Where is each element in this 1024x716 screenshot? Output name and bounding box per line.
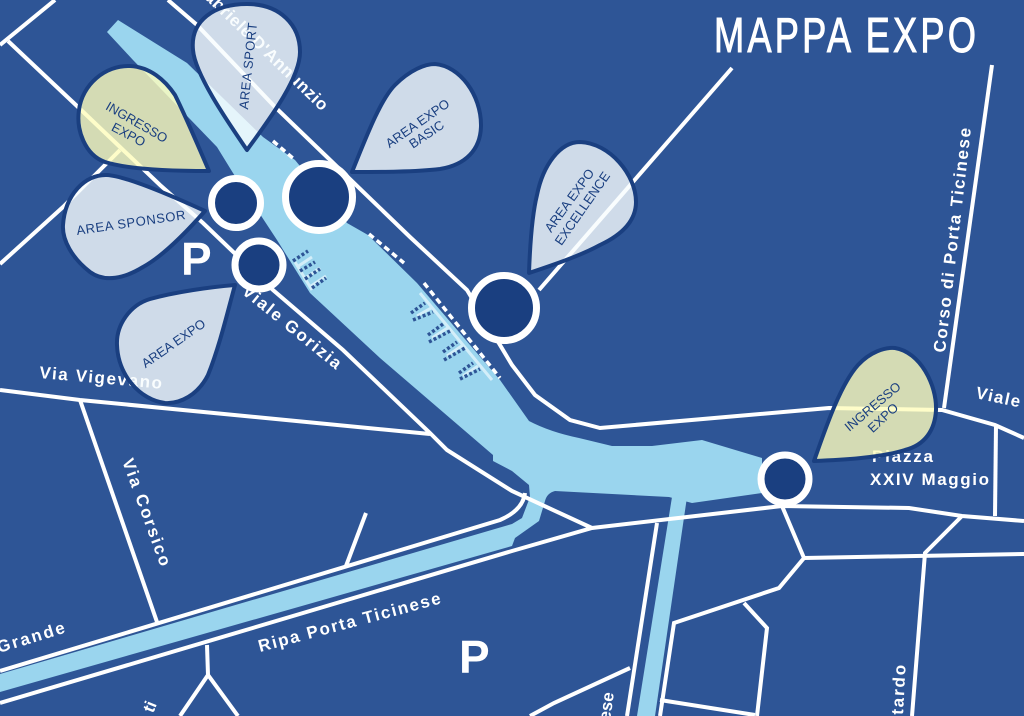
pin: area expo basic: BASIC: [406, 117, 447, 151]
street label: Viale Gorizia: Viale Gorizia: [238, 281, 346, 373]
pin: area expo: [117, 285, 235, 403]
street label: Viale: Viale: [974, 383, 1022, 411]
street label: Via Vigevano: Via Vigevano: [39, 363, 163, 393]
title: MAPPA EXPO: [714, 9, 976, 63]
pin: area expo basic: [352, 64, 481, 172]
street label: Piazza XXIV Maggio: [870, 447, 989, 489]
street label: Via Corsico: Via Corsico: [118, 456, 175, 569]
marker circle: ingresso east: [761, 455, 809, 503]
pin: ingresso expo west: EXPO: [109, 119, 148, 150]
street label: Piazza XXIV Maggio: Piazza: [872, 447, 934, 466]
parking stands: light stripes: [295, 257, 492, 380]
marker circle: basic: [286, 164, 352, 230]
pin: area sponsor: [63, 175, 205, 278]
pin: ingresso expo west: [78, 66, 209, 171]
street label: tardo: tardo: [888, 664, 910, 715]
marker circle: sponsor: [212, 178, 260, 228]
marker circle: expo: [235, 241, 283, 289]
street label: Ripa Porta Ticinese: Ripa Porta Ticinese: [256, 589, 443, 656]
pin: area expo excellence: AREA EXPO: [541, 166, 597, 235]
pin: area sport: AREA SPORT: [236, 22, 260, 110]
pin: area expo excellence: EXCELLENCE: [552, 169, 613, 248]
parking stands: dotted rows: [293, 251, 480, 379]
street label: Corso di Porta Ticinese: Corso di Porta Ticinese: [930, 127, 975, 353]
parking marker P north: P: [181, 233, 212, 285]
dashed white lines along the canal: [273, 141, 500, 378]
water: Darsena and canals: [0, 20, 762, 716]
pin: area expo excellence: [529, 142, 636, 273]
pin: area sport: [193, 4, 300, 150]
pin: ingresso expo west: INGRESSO: [103, 98, 170, 146]
pin: ingresso expo east: EXPO: [865, 400, 901, 436]
pin: area expo: AREA EXPO: [139, 316, 208, 371]
street label: ti: ti: [139, 698, 161, 715]
marker circle: excellence: [472, 276, 536, 340]
parking marker P south: P: [459, 631, 490, 683]
pin: ingresso expo east: [814, 348, 936, 461]
pin: ingresso expo east: INGRESSO: [842, 379, 904, 434]
street label: Piazza XXIV Maggio: XXIV Maggio: [870, 470, 989, 489]
pin: area expo basic: AREA EXPO: [383, 96, 452, 151]
pin: area sponsor: AREA SPONSOR: [75, 207, 186, 238]
